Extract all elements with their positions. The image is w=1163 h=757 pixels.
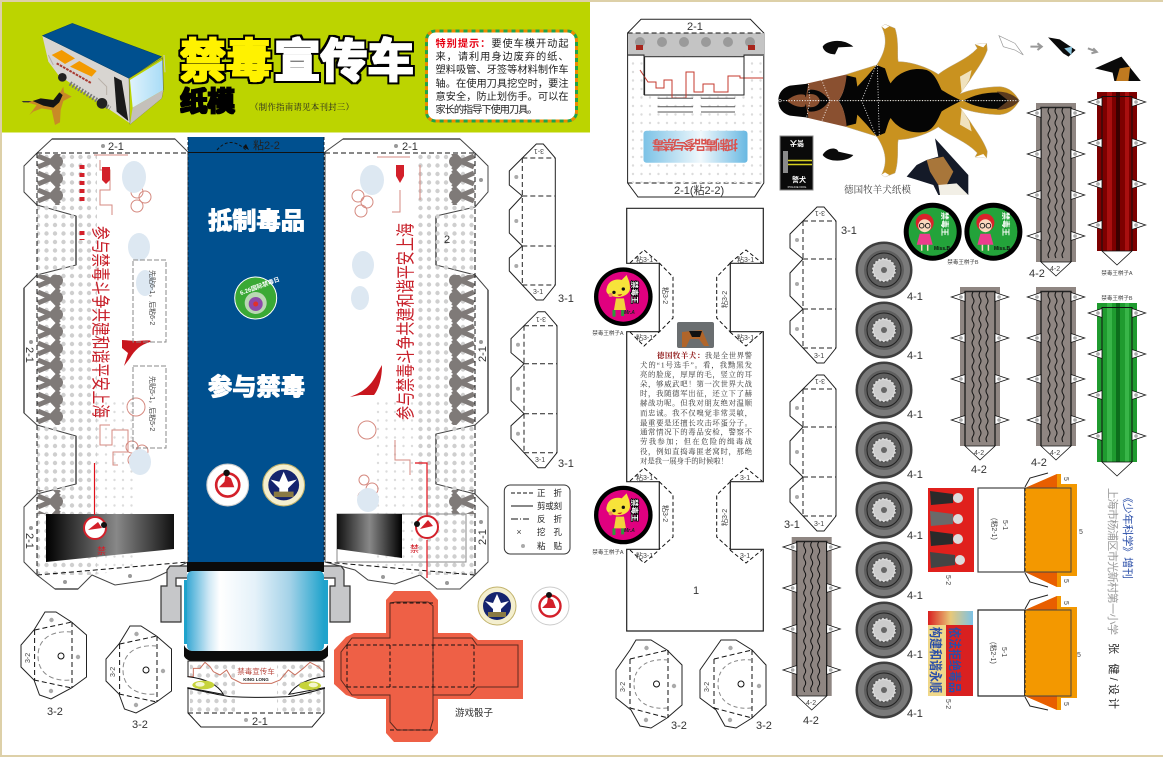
- wheels column: 4-1: [907, 409, 923, 421]
- tab labels: 粘3-1: [737, 333, 754, 342]
- dog story text: 通常情况下的毒品安检，警察不: [640, 428, 753, 438]
- wheels column: 4-1: [907, 350, 923, 362]
- red bomb and figures: [102, 167, 110, 184]
- tab labels: 粘3-1: [737, 255, 754, 264]
- tread: middle right: 4-2: [1031, 457, 1047, 469]
- credit: magazine: 《少年科学》增刊: [1121, 492, 1135, 579]
- icon: red bird: [350, 365, 382, 397]
- spare logo blue: [478, 587, 516, 625]
- dog photo: [677, 322, 714, 348]
- panel: game dice net: [334, 591, 523, 742]
- panel: truck left side: [23, 139, 188, 589]
- panel: 3-1 tabs D: [784, 375, 836, 531]
- tree piece: red: 禁毒王棋子A: [1101, 269, 1133, 277]
- panel: truck right side: [325, 139, 489, 589]
- panel: 3-1 tabs A: 3-1: [533, 289, 543, 296]
- tread: middle left: [951, 287, 1009, 476]
- dice caption: 游戏骰子: [455, 707, 494, 719]
- panel: wheel covers 3-2 right: 3-2: [620, 682, 627, 692]
- legend: 反 折: [537, 514, 562, 524]
- panel: wheel covers 3-2 right: 3-2: [756, 720, 772, 732]
- police dog card: 警犬: [792, 175, 806, 184]
- tread: top: [1027, 103, 1085, 280]
- panel: box 5 lower: 5-1: [1000, 647, 1007, 657]
- legend: 剪或刻: [537, 501, 562, 511]
- panel: 3-1 tabs A: 3-1: [558, 293, 574, 305]
- callout: safety tip: 轴。在使用刀具挖空时，要注: [436, 77, 568, 90]
- police dog card: [780, 136, 813, 190]
- panel: box 5 upper: (粘2-1): [990, 518, 999, 540]
- panel: 3-1 tabs C: 3-1: [841, 225, 857, 237]
- dog story text: 朵，够威武吧！第一次世界大战: [640, 379, 753, 389]
- panel: 3-1 tabs B: 3-1: [535, 457, 545, 464]
- poster: anti-drug slogan: 5-2: [944, 699, 951, 709]
- tab labels: [636, 255, 754, 597]
- tree piece: green: [1088, 294, 1146, 476]
- tab labels: 粘3-1: [636, 333, 653, 342]
- panel: 3-1 tabs D: 3-1: [815, 377, 825, 384]
- wheels column: 4-1: [907, 530, 923, 542]
- tread: middle right: 4-2: [1050, 450, 1060, 457]
- tread: lower left: [783, 537, 840, 727]
- dog story text: 德国牧羊犬：我是全世界警: [657, 351, 753, 360]
- spare logo red: [531, 587, 569, 625]
- legend: [504, 485, 570, 554]
- callout: safety tip: 来，请利用身边废弃的纸、: [436, 50, 568, 63]
- panel: 3-1 tabs B: 3-1: [558, 458, 574, 470]
- panel: 3-1 tabs C: 3-1: [815, 209, 825, 216]
- dashed window 5: 先贴5-1，后粘5-2: [148, 376, 157, 431]
- tab labels: 粘3-2: [720, 291, 729, 308]
- wheels column: 4-1: [907, 291, 923, 303]
- panel: truck cab front: 禁毒宣传车: [237, 666, 275, 676]
- panel: 3-1 tabs B: 3-1: [536, 315, 546, 322]
- panel: wheel covers 3-2 right: [616, 640, 772, 732]
- tree piece: green: 禁毒王棋子B: [1101, 294, 1133, 302]
- panel: truck body 1 with dog text: [627, 208, 763, 631]
- flap labels: 2-1: [402, 141, 418, 153]
- panel: truck cab front: 2-1: [252, 716, 268, 728]
- game piece: Miss.B left: Miss.B: [934, 246, 951, 252]
- panel: blue truck roof: [188, 137, 324, 562]
- dog story text: 犬的“1号选手”。看，我黝黑发: [640, 361, 753, 371]
- dashed window 6: [133, 260, 166, 342]
- Miss.B caption: 禁毒王棋子B: [947, 258, 979, 266]
- game piece: Miss.B right: [964, 203, 1022, 261]
- wheels column: [856, 242, 923, 720]
- panel: wheel covers 3-2 left: 3-2: [132, 719, 148, 731]
- poster: anti-drug slogan: 依法拒绝毒品: [947, 627, 962, 693]
- dog story text: 最重要是还擅长攻击坏蛋分子。: [640, 418, 752, 427]
- panel: wheel covers 3-2 right: 3-2: [671, 720, 687, 732]
- tread: lower left: 4-2: [803, 715, 819, 727]
- panel: 3-1 tabs C: 3-1: [814, 353, 824, 360]
- callout: safety tip: 特别提示：要使车模开动起: [436, 37, 568, 50]
- panel: wheel covers 3-2 left: 3-2: [110, 667, 117, 677]
- panel: box 5 lower: 5: [1062, 601, 1069, 605]
- game piece: Mr.A bottom: Mr.A: [624, 528, 635, 534]
- roof slogan bottom: 参与禁毒: [208, 373, 305, 401]
- dog story text: 赫战功呢。但我对朋友绝对温顺: [640, 398, 753, 407]
- tab labels: 3-1: [740, 553, 750, 560]
- title: 宣传车: 宣传车: [274, 35, 414, 87]
- callout: safety tip: 家长的指导下使用刀具。: [436, 103, 538, 116]
- panel: wheel covers 3-2 left: 3-2: [25, 653, 32, 663]
- skyline and balloons: [352, 157, 420, 503]
- legend: 挖 孔: [537, 527, 562, 537]
- flap labels: [23, 141, 132, 584]
- poster: red figures: 5-2: [944, 575, 951, 585]
- panel: box 5 upper: 5: [1062, 579, 1069, 583]
- flap labels: [381, 141, 489, 585]
- door panel: [337, 463, 466, 578]
- glue label: 粘2-2: [253, 138, 280, 152]
- poster: anti-drug slogan: [928, 611, 973, 709]
- dog story text: 劳我参加；但在危险的缉毒战: [640, 437, 753, 446]
- header banner: [2, 2, 590, 132]
- dashed window 5: [133, 366, 166, 448]
- guide note: （制作指南请见本刊封三）: [250, 102, 354, 112]
- wheels column: 4-1: [907, 469, 923, 481]
- tab labels: 粘3-1: [636, 255, 653, 264]
- game piece: Mr.A top: Mr.A: [624, 310, 635, 316]
- badge: red logo: [207, 464, 249, 506]
- callout: safety tip: 意安全，防止划伤手。可以在: [436, 90, 568, 103]
- panel: dog paper model: [778, 24, 1141, 196]
- poster: red figures: [928, 488, 974, 585]
- tread: lower left: 4-2: [806, 700, 816, 707]
- legend: ×: [516, 527, 522, 537]
- badge: blue logo: [263, 464, 305, 506]
- panel: wheel covers 3-2 right: 3-2: [704, 682, 711, 692]
- dog story text: 亮的脸庞，厚厚的毛，竖立的耳: [640, 370, 753, 380]
- panel: wheel covers 3-2 left: 3-2: [47, 706, 63, 718]
- panel: 3-1 tabs D: 3-1: [784, 519, 800, 531]
- panel: 3-1 tabs D: 3-1: [814, 521, 824, 528]
- door panel: [46, 463, 174, 562]
- tab labels: 1: [693, 585, 699, 597]
- icon: red bird: [122, 340, 151, 366]
- tread: top: 4-2: [1050, 266, 1060, 273]
- skyline and balloons: [94, 155, 151, 466]
- panel: box 5 lower: [978, 595, 1081, 710]
- dog story text: 而忠诚。我不仅嗅觉非常灵敏，: [640, 408, 752, 418]
- dog story text: [640, 351, 753, 465]
- flap labels: 2-1: [477, 346, 489, 362]
- panel: 3-1 tabs B: [511, 312, 574, 470]
- legend: 正 折: [537, 488, 562, 498]
- dog story text: 役，例如直捣毒匪老窝时，那绝: [640, 447, 753, 457]
- flap labels: 2-1: [477, 529, 489, 545]
- wheels column: 4-1: [907, 590, 923, 602]
- game piece: Miss.B left: [904, 203, 962, 261]
- flap labels: 2-1: [108, 141, 124, 153]
- game piece: Miss.B left: 禁毒王: [940, 212, 950, 236]
- panel: box 5 upper: [978, 473, 1083, 587]
- game piece: Mr.A top: [592, 267, 653, 337]
- panel: box 5 lower: (粘2-1): [989, 642, 998, 664]
- flap labels: 2: [444, 234, 450, 246]
- panel: box 5 upper: 5: [1079, 529, 1083, 536]
- flap labels: 2-1: [23, 347, 35, 363]
- mirror arm left: [161, 566, 187, 622]
- panel: 3-1 tabs A: [509, 144, 574, 305]
- tread: middle right: [1027, 287, 1085, 469]
- red bomb: [396, 165, 404, 183]
- tab labels: 粘3-1: [636, 551, 653, 560]
- door panel: 禁: [97, 546, 106, 556]
- dog story text: 对是我一展身手的时候啦！: [640, 456, 728, 465]
- icon: small shepherd dog: [22, 87, 72, 125]
- game piece: Miss.B right: 禁毒王: [1001, 212, 1011, 236]
- door panel: 禁: [410, 544, 419, 554]
- slogan: 参与禁毒斗争共建和谐平安上海: [89, 226, 111, 418]
- tread: middle left: 4-2: [971, 464, 987, 476]
- panel: truck rear 2-1: 2-1(粘2-2): [674, 183, 724, 197]
- panel: box 5 lower: 5: [1077, 652, 1081, 659]
- tread: top: 4-2: [1029, 268, 1045, 280]
- tab labels: 粘3-1: [636, 473, 653, 482]
- panel: box 5 upper: 5: [1062, 477, 1069, 481]
- game piece: Mr.A top: 禁毒王: [630, 281, 640, 304]
- dog story text: 时，我随德军出征，还立下了赫: [640, 389, 753, 399]
- police dog card: 警犬: [790, 139, 804, 148]
- panel: truck rear 2-1: 2-1: [687, 21, 703, 33]
- rear sign: 抵制毒品 参与禁毒: [652, 137, 738, 152]
- tab labels: 粘3-2: [661, 287, 670, 304]
- panel: box 5 upper: 5-1: [1001, 520, 1008, 530]
- panel: truck cab front: [161, 562, 350, 728]
- panel: wheel covers 3-2 left: [21, 612, 172, 731]
- credit: designer: 张 健/设计: [1107, 643, 1120, 709]
- panel: 3-1 tabs A: 3-1: [534, 147, 544, 154]
- panel: truck rear 2-1: [628, 19, 764, 197]
- tab labels: 3-1: [740, 475, 750, 482]
- tree piece: red: [1088, 92, 1146, 277]
- panel: 3-1 tabs C: [790, 207, 857, 363]
- title: 禁毒: 禁毒: [180, 35, 272, 87]
- rear sign: [644, 131, 748, 163]
- dog model caption: 德国牧羊犬纸模: [844, 184, 911, 196]
- glue label: [217, 138, 280, 152]
- game piece: Mr.A top: 禁毒王棋子A: [592, 329, 624, 337]
- panel: truck cab front: KING LONG: [243, 677, 269, 682]
- callout: safety tip: [426, 31, 576, 121]
- game piece: Mr.A bottom: [592, 486, 653, 556]
- tab labels: 粘3-2: [661, 505, 670, 522]
- game piece: Miss.B right: Miss.B: [994, 246, 1011, 252]
- badge: 6.26: 6.26国际禁毒日: [239, 275, 281, 297]
- roof slogan top: 抵制毒品: [208, 208, 305, 235]
- badge: 6.26: [235, 275, 281, 319]
- flap labels: 2-1: [23, 533, 35, 549]
- dashed window 6: 先贴6-1，后粘6-2: [148, 270, 157, 325]
- game piece: Mr.A bottom: 禁毒王棋子A: [592, 548, 624, 556]
- mirror arm right: [324, 566, 350, 622]
- poster: anti-drug slogan: 构建和谐永顺: [928, 627, 943, 693]
- game piece: Mr.A bottom: 禁毒王: [630, 499, 640, 522]
- icon: paper truck model: [42, 23, 165, 124]
- legend: 粘 贴: [537, 541, 562, 551]
- police dog card: POLICE DOG: [788, 185, 807, 189]
- wheels column: 4-1: [907, 708, 923, 720]
- tread: middle left: 4-2: [974, 450, 984, 457]
- panel: box 5 lower: 5: [1062, 702, 1069, 706]
- subtitle: 纸模: 纸模: [180, 87, 235, 117]
- slogan: 参与禁毒斗争共建和谐平安上海: [395, 223, 417, 420]
- wheels column: 4-1: [907, 649, 923, 661]
- credit: school: 上海市杨浦区市光新村第一小学: [1106, 488, 1120, 635]
- tab labels: 粘3-2: [720, 509, 729, 526]
- callout: safety tip: 塑料吸管、牙签等材料制作车: [436, 63, 568, 76]
